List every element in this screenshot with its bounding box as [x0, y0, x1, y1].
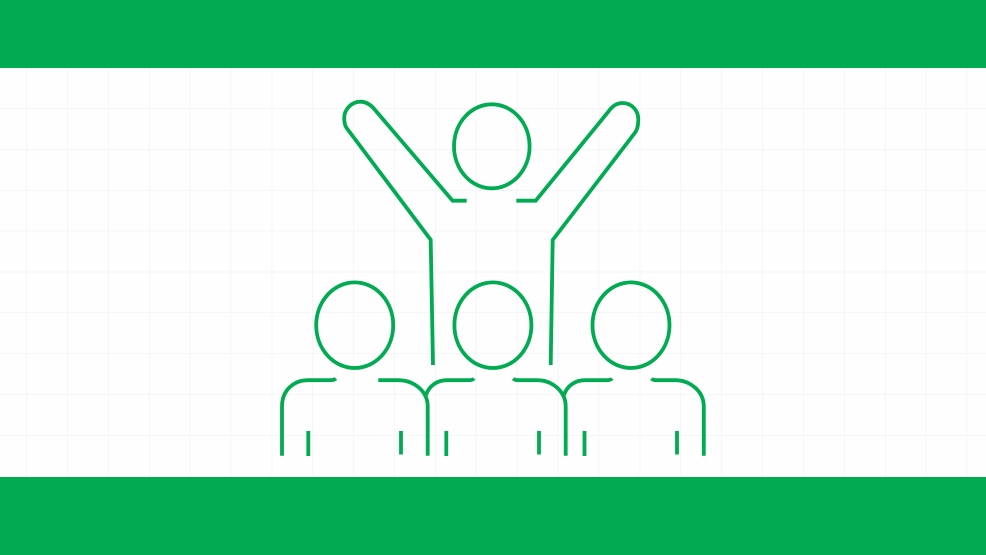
top figure head	[454, 104, 530, 188]
bottom right person	[564, 282, 704, 456]
top green band	[0, 0, 986, 68]
right person head	[592, 282, 670, 368]
right person arm lines	[584, 431, 677, 456]
top figure left arm and side	[344, 102, 467, 365]
bottom middle person	[426, 282, 566, 456]
top figure: raised arms and torso	[344, 102, 638, 365]
left person head	[316, 282, 393, 368]
right person body	[564, 378, 704, 456]
bottom green band	[0, 477, 986, 555]
left person arm lines	[308, 431, 401, 456]
middle person head	[454, 282, 531, 368]
bottom left person	[282, 282, 428, 456]
middle person body	[426, 378, 566, 456]
left person body	[282, 378, 428, 456]
top figure right arm and side	[516, 103, 638, 365]
middle person arm lines	[446, 431, 539, 456]
icon: group of people with leader raising arms	[282, 102, 704, 456]
